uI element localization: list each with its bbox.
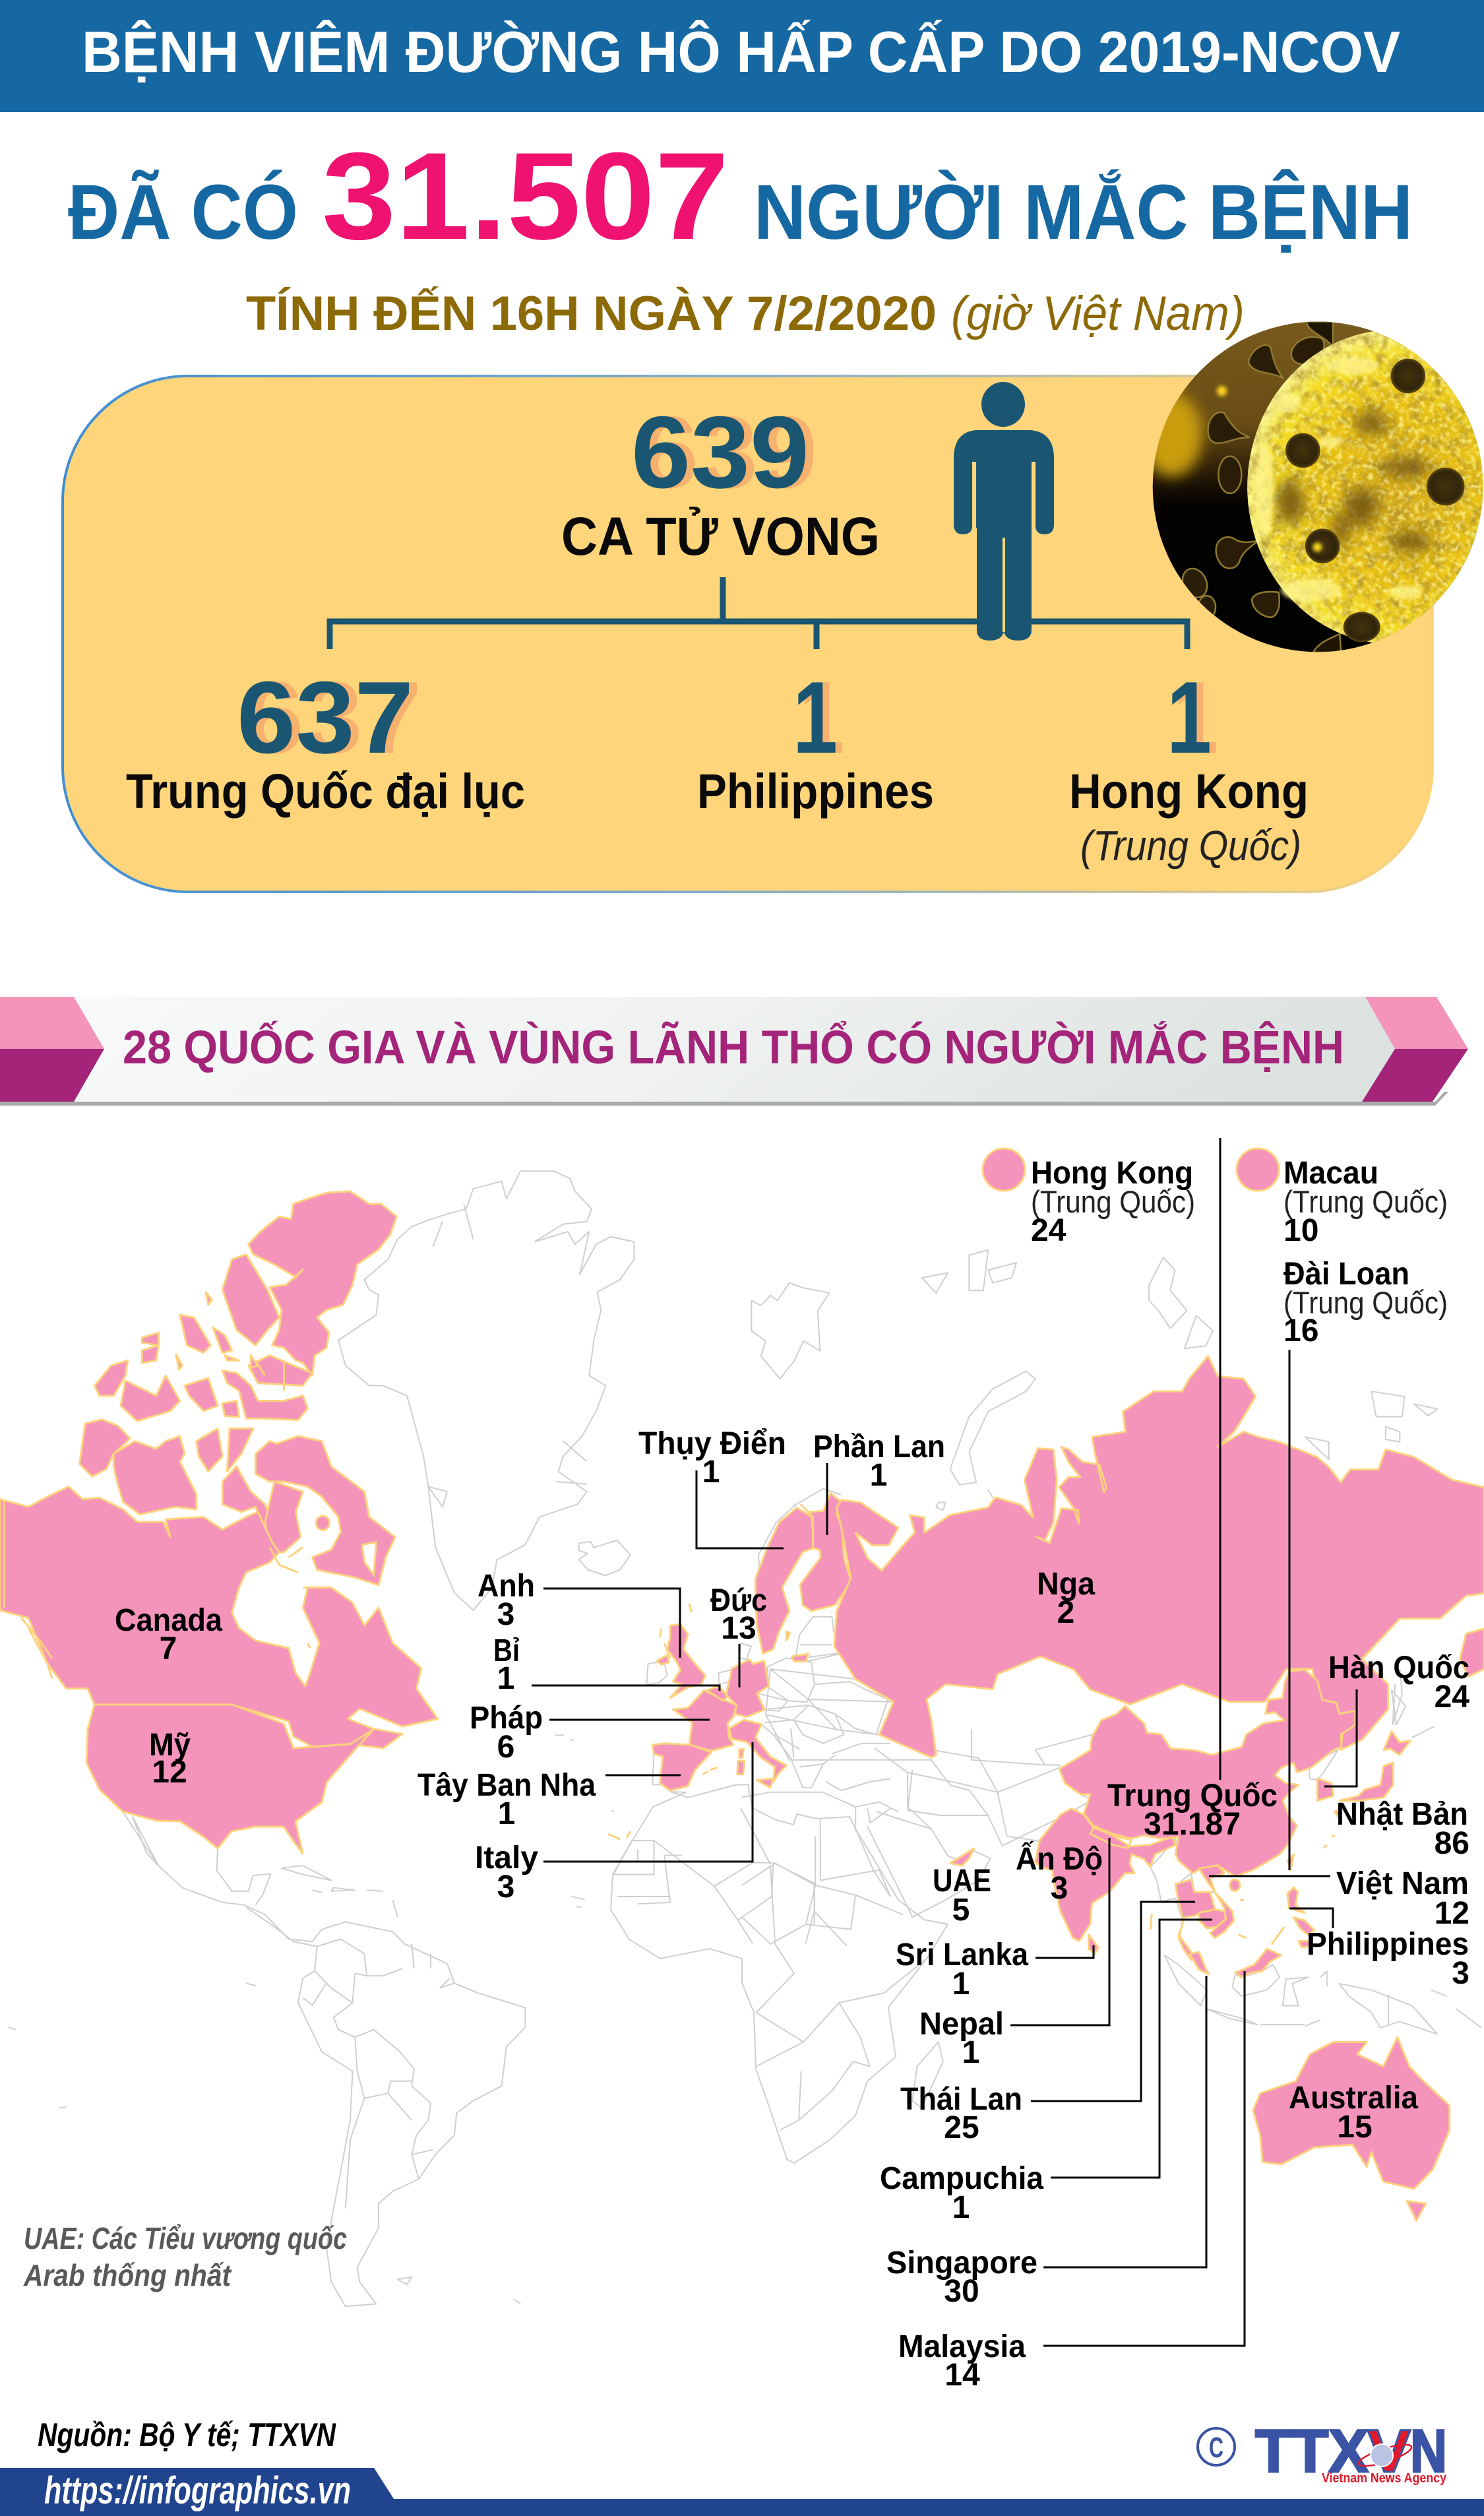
stat: Hong Kong: (Trung Quốc) bbox=[1080, 822, 1301, 869]
headline: total cases: 31.507 bbox=[322, 127, 729, 265]
label: Đức: 13 bbox=[721, 1611, 757, 1646]
label: Italy bbox=[475, 1840, 538, 1904]
country: United States bbox=[86, 1705, 374, 1854]
label: Mỹ: Mỹ bbox=[149, 1728, 191, 1763]
label: Campuchia: Campuchia bbox=[880, 2161, 1043, 2196]
stat: Philippines: 1 bbox=[799, 660, 844, 774]
label: Singapore: 30 bbox=[944, 2274, 979, 2309]
country: Thailand bbox=[1175, 1879, 1215, 1960]
label: Nga: 2 bbox=[1057, 1595, 1074, 1630]
virus sphere bbox=[1246, 329, 1484, 646]
country: India and Nepal bbox=[1035, 1809, 1175, 1941]
label: Đức: Đức bbox=[710, 1583, 767, 1618]
label: Philippines: Philippines bbox=[1307, 1927, 1469, 1962]
country: South Korea bbox=[1317, 1778, 1333, 1801]
country: China bbox=[1059, 1670, 1355, 1876]
logo: TTXVN: TTX bbox=[1255, 2418, 1369, 2485]
icon: copyright bbox=[1198, 2428, 1235, 2465]
logo: TTXVN: N bbox=[1410, 2418, 1447, 2485]
label: Nepal bbox=[919, 2007, 1004, 2070]
label: Singapore bbox=[886, 2246, 1037, 2309]
label: Canada bbox=[115, 1603, 222, 1666]
label: Nhật Bản bbox=[1336, 1797, 1469, 1861]
label: Malaysia bbox=[898, 2329, 1026, 2393]
country: Russia bbox=[791, 1356, 1484, 1757]
label: Thụy Điển: 1 bbox=[702, 1455, 720, 1490]
label: Bỉ bbox=[493, 1633, 520, 1696]
label: Phần Lan: 1 bbox=[870, 1458, 887, 1493]
label: Thái Lan bbox=[900, 2082, 1022, 2145]
label: Malaysia: Malaysia bbox=[898, 2329, 1026, 2364]
country: France bbox=[673, 1690, 736, 1751]
country: Sweden bbox=[756, 1508, 815, 1654]
label: Thái Lan: Thái Lan bbox=[900, 2082, 1022, 2117]
note: UAE definition: UAE: Các Tiểu vương quốc bbox=[24, 2221, 347, 2255]
label: Việt Nam: 12 bbox=[1435, 1896, 1469, 1931]
banner title: 28 QUỐC GIA VÀ VÙNG LÃNH THỔ CÓ NGƯỜI MẮC BỆNH bbox=[123, 1021, 1344, 1074]
deaths number: 639 bbox=[631, 395, 809, 509]
label: Ấn Độ: Ấn Độ bbox=[1016, 1841, 1103, 1877]
label: Canada: Canada bbox=[115, 1603, 222, 1638]
legend: Macau: 10 bbox=[1283, 1213, 1318, 1248]
stat: Trung Quốc đại lục: 637 bbox=[245, 660, 421, 774]
label: Anh bbox=[478, 1569, 535, 1632]
label: Thụy Điển bbox=[638, 1426, 786, 1490]
subheading: date: TÍNH ĐẾN 16H NGÀY 7/2/2020 bbox=[246, 287, 937, 340]
label: Nhật Bản: 86 bbox=[1435, 1826, 1469, 1861]
country: UAE bbox=[950, 1848, 974, 1866]
world map bbox=[0, 1171, 1484, 2306]
label: Mỹ: 12 bbox=[152, 1755, 187, 1790]
country: Germany bbox=[726, 1660, 769, 1717]
banner: countries heading bbox=[0, 997, 1468, 1106]
stat: Philippines bbox=[697, 660, 934, 819]
label: Campuchia bbox=[880, 2161, 1043, 2225]
label: Ấn Độ: 3 bbox=[1051, 1871, 1068, 1906]
note: UAE definition: Arab thống nhất bbox=[23, 2258, 232, 2292]
website url: https://infographics.vn bbox=[44, 2469, 351, 2512]
label: Trung Quốc bbox=[1107, 1778, 1278, 1842]
stat: Hong Kong: 1 bbox=[1167, 660, 1212, 774]
deaths number: 639 bbox=[639, 395, 817, 509]
country: Belgium bbox=[707, 1686, 727, 1701]
label: Malaysia: 14 bbox=[944, 2358, 980, 2393]
label: Anh: 3 bbox=[497, 1597, 514, 1632]
label: Pháp: Pháp bbox=[470, 1701, 543, 1736]
label: Nga: Nga bbox=[1037, 1567, 1095, 1602]
leader lines bbox=[532, 1138, 1357, 2346]
label: Canada: 7 bbox=[160, 1631, 177, 1666]
label: Trung Quốc: Trung Quốc bbox=[1107, 1778, 1278, 1813]
label: Singapore: Singapore bbox=[886, 2246, 1037, 2280]
stat: Philippines: 1 bbox=[793, 660, 838, 774]
legend: Macau: Macau bbox=[1283, 1156, 1378, 1191]
title: BỆNH VIÊM ĐƯỜNG HÔ HẤP CẤP DO 2019-NCOV bbox=[82, 19, 1400, 84]
headline: total cases bbox=[68, 127, 1413, 265]
label: Ấn Độ bbox=[1016, 1841, 1103, 1906]
icon: person bbox=[954, 382, 1054, 641]
legend: Đài Loan: 16 bbox=[1283, 1313, 1318, 1348]
label: Phần Lan: Phần Lan bbox=[813, 1430, 945, 1464]
country: Cambodia bbox=[1199, 1910, 1226, 1928]
label: Thái Lan: 25 bbox=[944, 2110, 979, 2145]
regions: Taiwan and Hainan bbox=[1229, 1854, 1294, 1891]
bracket connector bbox=[330, 577, 1187, 649]
label: Bỉ: Bỉ bbox=[493, 1633, 520, 1668]
logo: TTXVN: V bbox=[1367, 2418, 1411, 2485]
label: Trung Quốc: 31.187 bbox=[1144, 1807, 1241, 1842]
legend: Hong Kong: 24 bbox=[1031, 1213, 1067, 1248]
label: Thụy Điển: Thụy Điển bbox=[638, 1426, 786, 1461]
label: Australia: 15 bbox=[1337, 2110, 1373, 2145]
label: Tây Ban Nha: 1 bbox=[498, 1796, 515, 1831]
icon: coronavirus image bbox=[1142, 310, 1484, 657]
label: UAE: 5 bbox=[952, 1893, 970, 1928]
label: Hàn Quốc: Hàn Quốc bbox=[1328, 1651, 1469, 1685]
label: UAE bbox=[933, 1864, 991, 1928]
footer bar bbox=[0, 2468, 1484, 2516]
label: Sri Lanka: 1 bbox=[952, 1966, 970, 2001]
label: Philippines: 3 bbox=[1452, 1956, 1469, 1991]
label: Sri Lanka: Sri Lanka bbox=[896, 1937, 1028, 1972]
legend: Hong Kong: (Trung Quốc) bbox=[1031, 1184, 1195, 1219]
label: Tây Ban Nha bbox=[417, 1768, 596, 1831]
label: Campuchia: 1 bbox=[952, 2190, 970, 2225]
map: unaffected land outlines bbox=[9, 1171, 1481, 2306]
stat: Trung Quốc đại lục: 637 bbox=[237, 660, 414, 774]
subheading: date bbox=[246, 287, 1245, 340]
legend: Đài Loan bbox=[1283, 1257, 1448, 1348]
stat: Philippines: Philippines bbox=[697, 764, 934, 819]
stat: Trung Quốc đại lục bbox=[126, 660, 525, 819]
legend: Đài Loan: (Trung Quốc) bbox=[1283, 1285, 1448, 1320]
deaths label: CA TỬ VONG bbox=[561, 507, 880, 567]
country: Philippines bbox=[1272, 1887, 1314, 1947]
legend: Hong Kong: Hong Kong bbox=[1031, 1156, 1193, 1191]
headline: total cases: NGƯỜI MẮC BỆNH bbox=[754, 168, 1413, 256]
panel: deaths bbox=[63, 376, 1433, 892]
label: Anh: Anh bbox=[478, 1569, 535, 1604]
label: Bỉ: 1 bbox=[497, 1661, 514, 1696]
label: Phần Lan bbox=[813, 1430, 945, 1493]
subheading: date: (giờ Việt Nam) bbox=[951, 287, 1245, 340]
label: Việt Nam bbox=[1336, 1866, 1469, 1931]
country: Australia bbox=[1253, 2037, 1450, 2220]
legend: Hong Kong bbox=[983, 1148, 1195, 1248]
label: Hàn Quốc: 24 bbox=[1435, 1680, 1469, 1714]
stat: Hong Kong: Hong Kong bbox=[1069, 764, 1309, 819]
label: Nga bbox=[1037, 1567, 1095, 1630]
header bar bbox=[0, 0, 1484, 112]
country: Spain bbox=[608, 1744, 717, 1839]
label: Nhật Bản: Nhật Bản bbox=[1336, 1797, 1468, 1832]
note: UAE definition bbox=[23, 2221, 347, 2292]
country: Japan bbox=[1324, 1731, 1411, 1848]
label: Australia bbox=[1289, 2081, 1418, 2145]
legend: Đài Loan: Đài Loan bbox=[1283, 1257, 1409, 1292]
country: Sri Lanka bbox=[1089, 1935, 1098, 1954]
label: Italy: Italy bbox=[475, 1840, 538, 1875]
label: Philippines bbox=[1307, 1927, 1469, 1991]
country: Canada and Arctic islands bbox=[0, 1191, 438, 1748]
label: Hàn Quốc bbox=[1328, 1651, 1469, 1714]
stat: Trung Quốc đại lục: Trung Quốc đại lục bbox=[126, 764, 525, 819]
logo: TTXVN: Vietnam News Agency bbox=[1322, 2471, 1447, 2486]
legend: Macau: (Trung Quốc) bbox=[1283, 1184, 1448, 1219]
headline: total cases: ĐÃ CÓ bbox=[68, 169, 298, 256]
stat: Hong Kong bbox=[1069, 660, 1309, 869]
icon: copyright: C bbox=[1209, 2432, 1223, 2464]
country: Italy bbox=[729, 1720, 786, 1788]
label: Việt Nam: Việt Nam bbox=[1336, 1866, 1469, 1901]
country: Finland bbox=[800, 1493, 851, 1611]
label: Mỹ bbox=[149, 1728, 191, 1790]
logo: TTXVN bbox=[1255, 2418, 1447, 2486]
label: Pháp: 6 bbox=[497, 1730, 514, 1765]
country: Malaysia and Singapore bbox=[1150, 1900, 1281, 1977]
country: United Kingdom bbox=[657, 1604, 706, 1698]
legend: Macau bbox=[1237, 1148, 1448, 1248]
label: Australia: Australia bbox=[1289, 2081, 1418, 2116]
label: Nepal: 1 bbox=[962, 2035, 979, 2070]
label: UAE: UAE bbox=[933, 1864, 991, 1899]
label: Nepal: Nepal bbox=[919, 2007, 1004, 2042]
label: Sri Lanka bbox=[896, 1937, 1028, 2001]
source: Nguồn: Bộ Y tế; TTXVN bbox=[38, 2416, 336, 2453]
country: Vietnam bbox=[1199, 1866, 1234, 1938]
label: Tây Ban Nha: Tây Ban Nha bbox=[417, 1768, 596, 1803]
label: Italy: 3 bbox=[497, 1870, 514, 1904]
label: Đức bbox=[710, 1583, 767, 1646]
stat: Hong Kong: 1 bbox=[1173, 660, 1218, 774]
label: Pháp bbox=[470, 1701, 543, 1765]
